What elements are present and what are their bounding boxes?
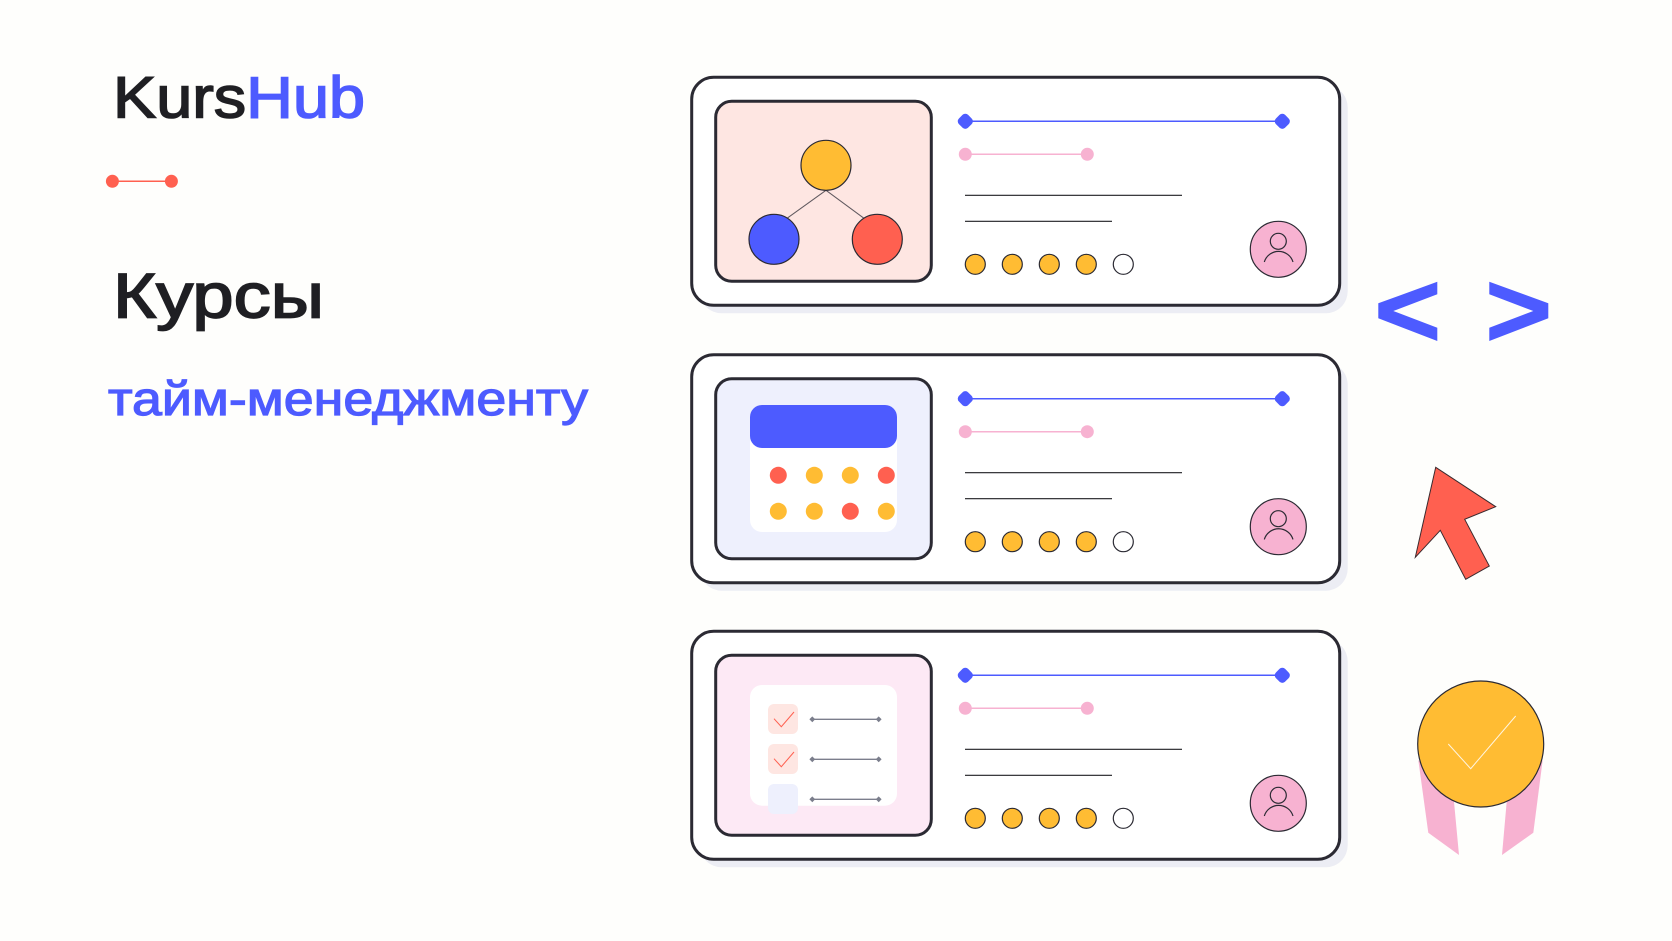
text placeholder lines bbox=[965, 473, 1182, 499]
heading: Курсы: Курсы bbox=[113, 262, 324, 332]
panel: course card 3 bbox=[692, 631, 1348, 867]
icon: cursor arrow bbox=[1415, 467, 1496, 579]
rating: four of five dots bbox=[965, 254, 1133, 274]
subtitle placeholder: pink line bbox=[959, 702, 1094, 715]
text placeholder lines bbox=[965, 749, 1182, 775]
title placeholder: blue line bbox=[956, 666, 1291, 684]
logo: KursHub: KursHub bbox=[113, 65, 365, 130]
subtitle placeholder: pink line bbox=[959, 148, 1094, 161]
rating: four of five dots bbox=[965, 532, 1133, 552]
title placeholder: blue line bbox=[956, 390, 1291, 408]
illustration: checklist bbox=[716, 655, 931, 835]
icon: avatar bbox=[1250, 221, 1306, 277]
text placeholder lines bbox=[965, 195, 1182, 221]
divider: red dots line bbox=[106, 175, 178, 188]
rating: four of five dots bbox=[965, 808, 1133, 828]
icon: code brackets bbox=[1378, 282, 1548, 341]
icon: avatar bbox=[1250, 775, 1306, 831]
title placeholder: blue line bbox=[956, 112, 1291, 130]
panel: course card 1 bbox=[692, 77, 1348, 313]
illustration: tree diagram bbox=[716, 101, 931, 281]
subheading: тайм-менеджменту: тайм-менеджменту bbox=[108, 372, 589, 425]
subtitle placeholder: pink line bbox=[959, 425, 1094, 438]
illustration: calendar bbox=[716, 379, 931, 559]
icon: medal bbox=[1418, 681, 1544, 855]
panel: course card 2 bbox=[692, 355, 1348, 591]
icon: avatar bbox=[1250, 499, 1306, 555]
